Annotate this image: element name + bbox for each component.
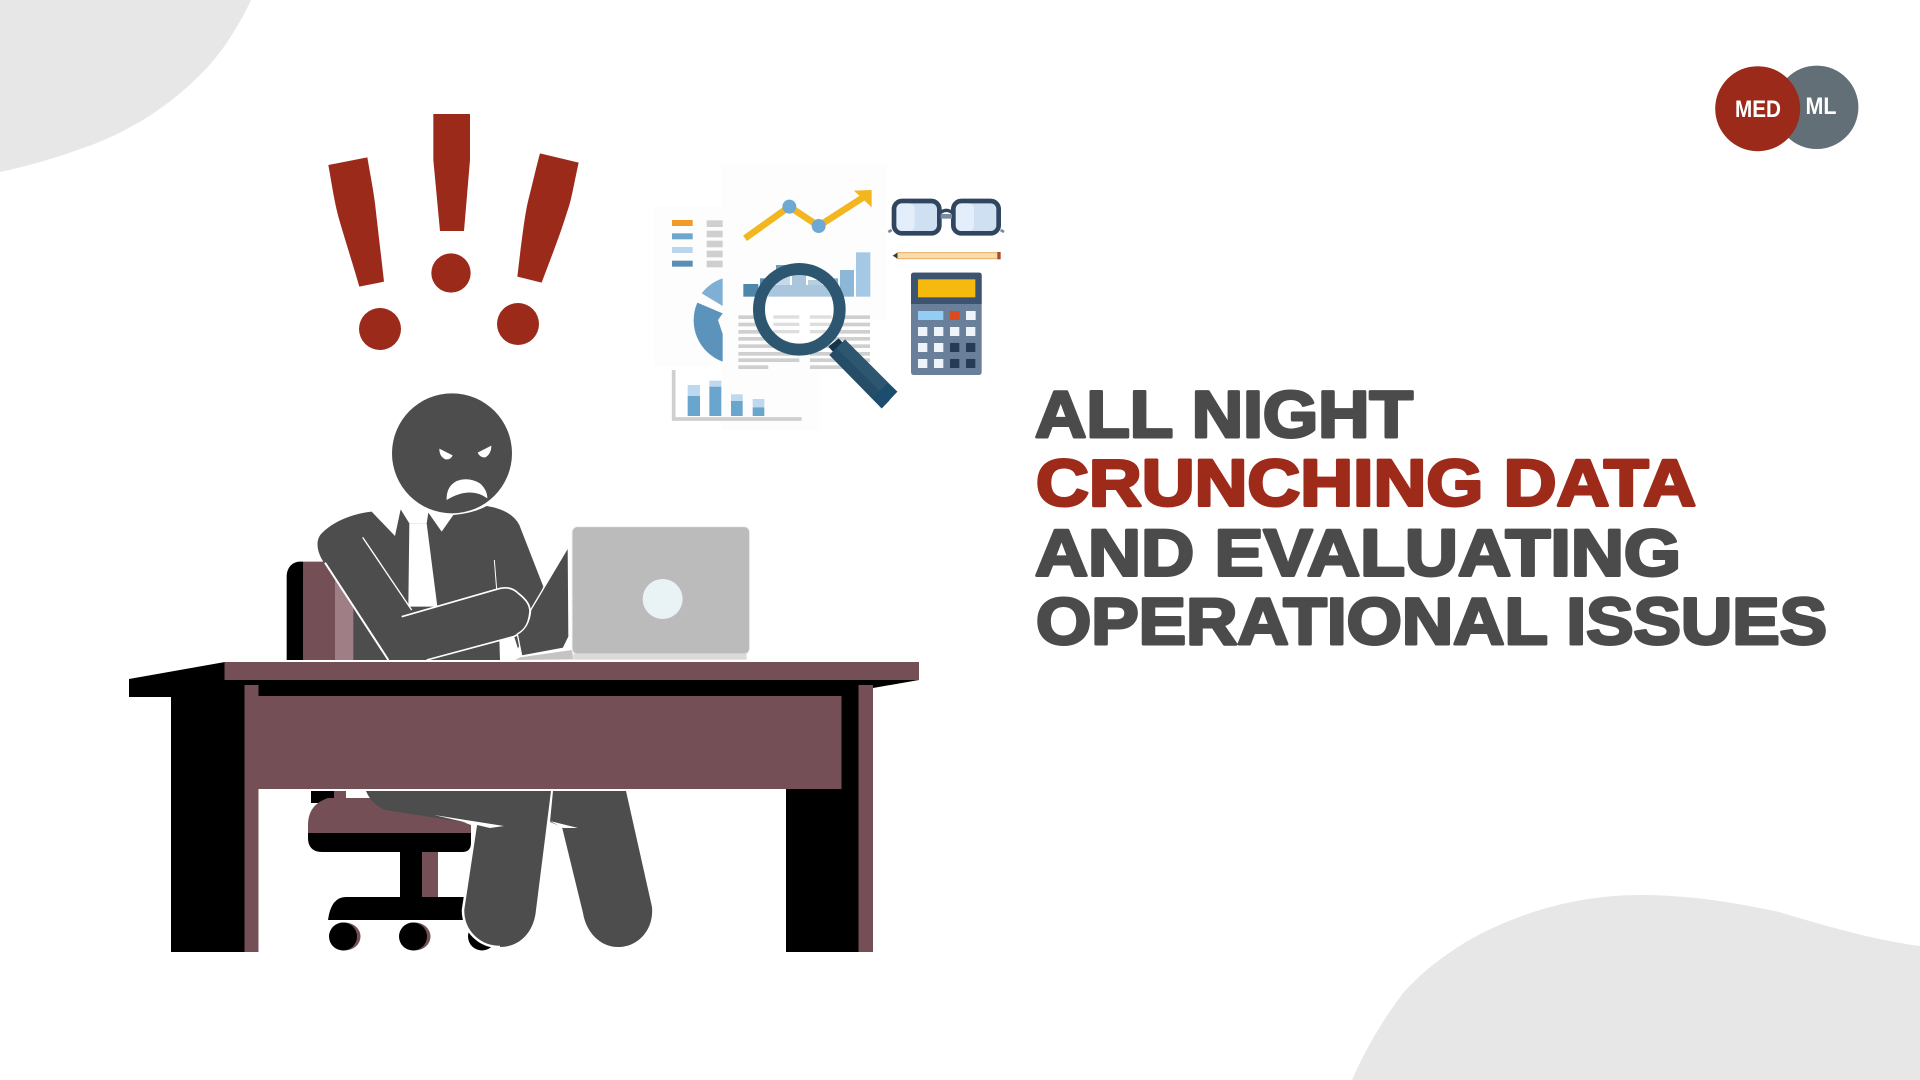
pencil [893,252,1001,259]
pie chart [694,278,723,362]
top bar chart [743,252,870,297]
legs [366,791,652,947]
logo: MED ML: ML [1806,93,1836,120]
legend list [672,220,723,267]
report text lines [738,315,870,369]
faint paper sheets [653,163,887,430]
bottom bar chart [674,370,802,419]
calculator [911,273,982,375]
glasses [888,201,1004,233]
chair seat and base [308,791,496,950]
chair back [287,562,355,660]
background blob: top left [0,0,251,172]
head [392,393,512,513]
background blob: bottom right [1352,895,1920,1080]
office chair [287,562,496,950]
logo: MED ML: MED [1735,96,1781,123]
line 3: AND EVALUATING [1035,516,1681,590]
line 1: ALL NIGHT [1035,378,1413,451]
icon: exclamation marks [328,114,579,350]
line chart arrow [745,190,872,238]
line 4: OPERATIONAL ISSUES [1036,585,1827,658]
logo: MED ML [1715,66,1858,151]
torso and arms [317,506,569,660]
line 2: CRUNCHING DATA [1036,446,1696,520]
desk [129,662,919,952]
person: angry businessman [317,393,652,947]
headline [1035,378,1827,658]
icon group: data reports, magnifier, glasses, pencil, calculator [653,163,1004,430]
magnifying glass [759,269,897,408]
laptop [515,527,750,660]
